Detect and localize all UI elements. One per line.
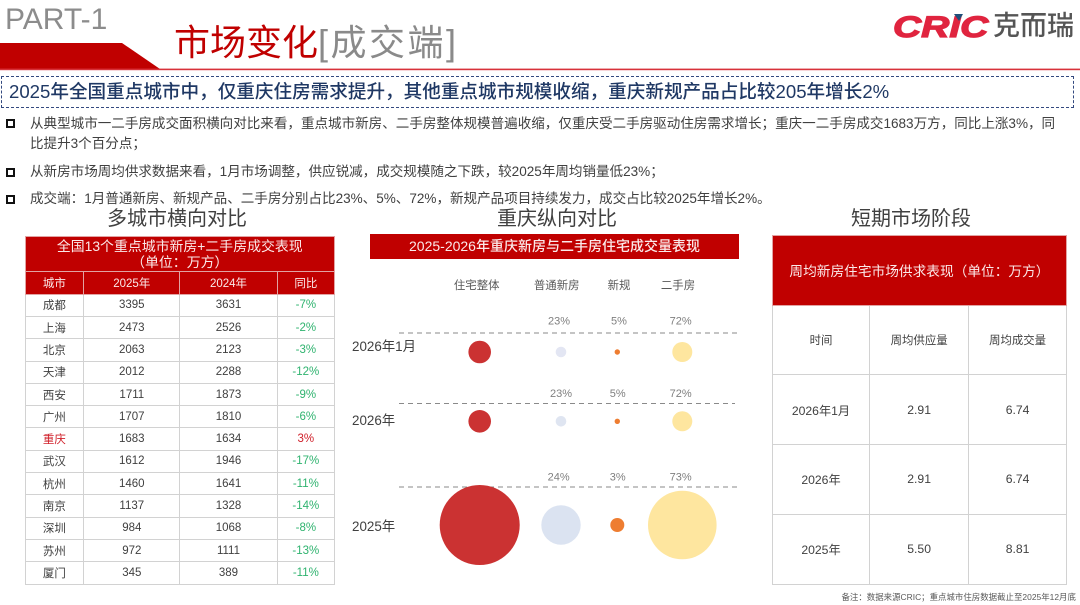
table: 13 cities: 2288: [216, 366, 241, 378]
table: 13 cities: -14%: [292, 500, 319, 512]
table: weekly supply and demand: 6.74: [1006, 472, 1029, 486]
row: 2026年: 72%: [670, 388, 692, 400]
table: 13 cities: 1460: [119, 478, 145, 490]
bullet text block: 从新房市场周均供求数据来看，1月市场调整，供应锐减，成交规模随之下跌，较2025年周均销量低23%；: [30, 164, 664, 179]
table: 13 cities: 厦门: [43, 568, 66, 580]
table: 13 cities: 广州: [43, 412, 66, 424]
table: 13 cities: -11%: [293, 478, 319, 490]
heading: short-term: 短期市场阶段: [851, 208, 971, 230]
title: 市场变化[成交端]: [174, 22, 459, 63]
banner: chongqing chart: [370, 234, 739, 259]
part label: PART-1: [5, 3, 107, 36]
table: 13 cities: 苏州: [43, 546, 66, 558]
table: 13 cities: 3%: [298, 433, 314, 445]
table: 13 cities: 1711: [119, 389, 144, 401]
table: 13 cities: 389: [219, 567, 238, 579]
row: 2026年1月: 5%: [611, 316, 627, 328]
table: 13 cities: 2063: [119, 344, 145, 356]
table: weekly supply and demand: 周均新房住宅市场供求表现（单位：万方）: [789, 264, 1049, 279]
heading: chongqing: 重庆纵向对比: [497, 208, 617, 230]
table: weekly supply and demand: 8.81: [1006, 542, 1029, 556]
table: 13 cities: 深圳: [43, 523, 66, 535]
table: 13 cities: 3395: [119, 299, 145, 311]
table: weekly supply and demand: 2025年: [801, 543, 841, 557]
footnote: 备注：数据来源CRIC；重点城市住房数据截止至2025年12月底: [842, 592, 1076, 602]
bullet text block: 成交端：1月普通新房、新规产品、二手房分别占比23%、5%、72%，新规产品项目持续发力，成交占比较2025年增长2%。: [30, 191, 771, 206]
row: 2026年: [352, 388, 692, 433]
table: 13 cities: 北京: [43, 345, 66, 357]
table: 13 cities: -9%: [296, 389, 316, 401]
table: 13 cities: 重庆: [43, 434, 66, 446]
row: 2025年: 2025年: [352, 519, 395, 534]
headline callout: 2025年全国重点城市中，仅重庆住房需求提升，其他重点城市规模收缩，重庆新规产品占比较205年增长2%: [9, 81, 889, 102]
table: weekly supply and demand: [772, 235, 1067, 585]
table: weekly supply and demand: 2026年1月: [792, 404, 850, 418]
row: 2025年: 3%: [610, 472, 626, 484]
bubble chart: [352, 278, 737, 565]
table: 13 cities: 2526: [216, 322, 241, 334]
bubble chart: 住宅整体: [454, 278, 500, 292]
bubble chart: 二手房: [661, 278, 695, 292]
table: 13 cities: 1641: [216, 478, 241, 490]
logo: CRIC: 克而瑞: [993, 11, 1074, 41]
banner: chongqing chart: 2025-2026年重庆新房与二手房住宅成交量表现: [409, 238, 700, 254]
logo: CRIC: [893, 11, 1074, 44]
table: 13 cities: 1137: [119, 500, 144, 512]
table: 13 cities: 2123: [216, 344, 241, 356]
table: 13 cities: 南京: [43, 501, 66, 513]
row: 2025年: [352, 472, 717, 565]
table: 13 cities: -7%: [296, 299, 316, 311]
table: 13 cities: 2012: [119, 366, 145, 378]
row: 2026年1月: 72%: [670, 316, 692, 328]
bubble chart: 新规: [608, 278, 630, 292]
table: 13 cities: 城市: [43, 278, 66, 290]
logo: CRIC: CRIC: [893, 11, 988, 44]
table: 13 cities: 3631: [216, 299, 241, 311]
table: 13 cities: 上海: [43, 323, 66, 335]
table: 13 cities: 1068: [216, 522, 241, 534]
row: 2025年: 73%: [670, 472, 692, 484]
table: 13 cities: -3%: [296, 344, 316, 356]
table: 13 cities: 984: [122, 522, 141, 534]
table: 13 cities: 1634: [216, 433, 241, 445]
table: 13 cities: 全国13个重点城市新房+二手房成交表现: [57, 238, 303, 254]
table: 13 cities: 1111: [217, 545, 240, 557]
table: 13 cities: 1946: [216, 455, 241, 467]
header red tab and rule: [0, 43, 1080, 70]
table: 13 cities: [25, 236, 335, 585]
table: 13 cities: 1810: [216, 411, 241, 423]
table: 13 cities: 西安: [43, 390, 66, 402]
table: 13 cities: -11%: [293, 567, 319, 579]
table: 13 cities: 同比: [294, 278, 317, 290]
table: 13 cities: -17%: [292, 455, 319, 467]
table: 13 cities: 武汉: [43, 456, 66, 468]
row: 2026年1月: 23%: [548, 316, 570, 328]
table: 13 cities: 2024年: [210, 278, 247, 290]
table: 13 cities: 2473: [119, 322, 145, 334]
table: 13 cities: 1328: [216, 500, 241, 512]
table: 13 cities: 1612: [119, 455, 145, 467]
table: weekly supply and demand: 周均供应量: [891, 335, 948, 347]
table: 13 cities: 1683: [119, 433, 145, 445]
table: weekly supply and demand: 时间: [810, 335, 832, 347]
table: 13 cities: -12%: [292, 366, 319, 378]
table: weekly supply and demand: 周均成交量: [989, 335, 1046, 347]
table: weekly supply and demand: 2026年: [801, 473, 841, 487]
headline callout: [1, 76, 1074, 108]
table: weekly supply and demand: 2.91: [907, 403, 931, 417]
table: 13 cities: 天津: [43, 367, 66, 379]
table: 13 cities: 杭州: [43, 479, 66, 491]
table: 13 cities: 1873: [216, 389, 241, 401]
row: 2025年: 24%: [548, 472, 570, 484]
table: 13 cities: 2025年: [113, 278, 150, 290]
table: 13 cities: 345: [122, 567, 141, 579]
row: 2026年1月: 2026年1月: [352, 339, 416, 354]
table: weekly supply and demand: 6.74: [1006, 403, 1029, 417]
table: 13 cities: -8%: [296, 522, 316, 534]
table: 13 cities: （单位：万方）: [131, 254, 228, 270]
table: 13 cities: 成都: [43, 300, 66, 312]
table: 13 cities: 972: [122, 545, 141, 557]
row: 2026年: 23%: [550, 388, 572, 400]
row: 2026年: 2026年: [352, 413, 395, 428]
table: 13 cities: 1707: [119, 411, 145, 423]
bullet text block: 从典型城市一二手房成交面积横向对比来看，重点城市新房、二手房整体规模普遍收缩，仅重庆受二手房驱动住房需求增长；重庆一二手房成交1683万方，同比上涨3%，同: [30, 116, 1055, 131]
table: 13 cities: -6%: [296, 411, 316, 423]
bubble chart: 普通新房: [534, 278, 579, 292]
table: weekly supply and demand: 5.50: [907, 542, 931, 556]
table: weekly supply and demand: 2.91: [907, 472, 931, 486]
table: 13 cities: -13%: [292, 545, 319, 557]
bullet text block: [6, 116, 1055, 206]
heading: multi-city: 多城市横向对比: [107, 208, 247, 230]
row: 2026年1月: [352, 316, 692, 363]
bullet text block: 比提升3个百分点；: [30, 136, 146, 151]
row: 2026年: 5%: [610, 388, 626, 400]
table: 13 cities: -2%: [296, 322, 316, 334]
